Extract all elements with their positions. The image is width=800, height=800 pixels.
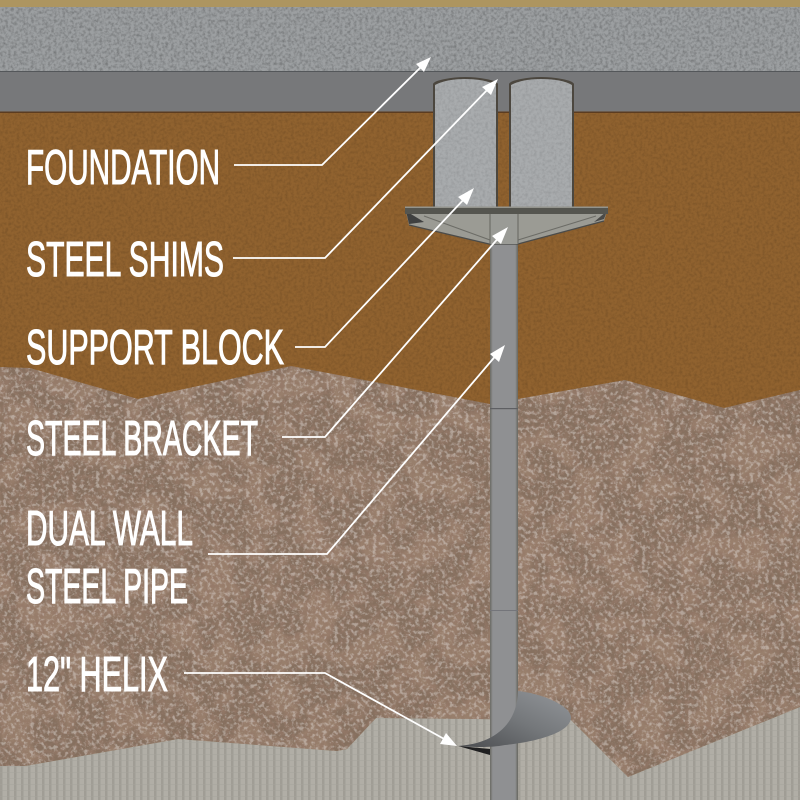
arrow: dual wall steel pipe [208, 345, 505, 554]
ground surface strip [0, 0, 800, 7]
layer: bedrock [0, 700, 800, 800]
label: dual wall steel pipe [26, 345, 505, 614]
label: steel bracket: STEEL BRACKET [26, 412, 258, 466]
layer: concrete foundation slab [0, 7, 800, 72]
label: support block [26, 188, 474, 375]
steel bracket [405, 206, 608, 244]
arrow: steel bracket [282, 227, 508, 437]
helix plate [458, 691, 571, 755]
label: dual wall steel pipe: STEEL PIPE [26, 560, 188, 614]
arrow: foundation [234, 57, 431, 165]
support blocks [430, 76, 580, 210]
label: steel shims: STEEL SHIMS [26, 233, 224, 287]
label: foundation [26, 57, 431, 195]
steel pipe [490, 240, 518, 800]
label: steel shims [26, 79, 498, 287]
layer: brown soil [0, 113, 800, 413]
label: dual wall steel pipe: DUAL WALL [26, 502, 193, 556]
label: 12 inch helix: 12" HELIX [26, 648, 168, 702]
left block [433, 77, 498, 208]
arrow: helix [184, 673, 457, 746]
label: foundation: FOUNDATION [26, 141, 220, 195]
right block [509, 77, 574, 208]
arrow: support block [295, 188, 474, 347]
label: steel bracket [26, 227, 508, 466]
arrow: steel shims [233, 79, 498, 258]
label: support block: SUPPORT BLOCK [26, 321, 284, 375]
layer: rocky soil [0, 360, 800, 780]
layer: foundation footing [0, 72, 800, 114]
label: 12 inch helix [26, 648, 457, 746]
